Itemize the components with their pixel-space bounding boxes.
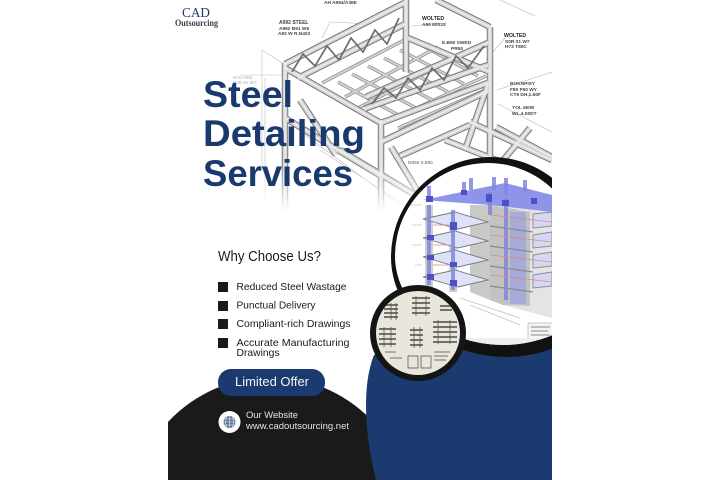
panel: steel frame drawing: A92 W R.N402 bbox=[278, 31, 311, 37]
title bbox=[204, 80, 362, 186]
benefits list bbox=[218, 281, 350, 359]
panel: rebar drawings ring bbox=[370, 285, 466, 381]
website text: www.cadoutsourcing.net bbox=[245, 421, 349, 432]
panel: steel frame drawing: AH A994/A36E bbox=[324, 0, 358, 6]
panel: steel frame drawing: WOLTED bbox=[504, 33, 526, 39]
website text: Our Website bbox=[246, 410, 298, 421]
benefits list: Compliant-rich Drawings bbox=[236, 318, 350, 330]
panel: steel frame drawing bbox=[233, 0, 552, 209]
panel: building image ring bbox=[391, 157, 552, 357]
icon: globe bbox=[218, 411, 240, 433]
title: Services bbox=[203, 153, 353, 194]
benefits list: Accurate Manufacturing bbox=[236, 337, 350, 349]
panel: steel frame drawing: S0R 01 W7 bbox=[505, 39, 530, 45]
logo: Outsourcing bbox=[175, 19, 218, 29]
heading: why choose us: Why Choose Us? bbox=[218, 249, 321, 265]
button: limited offer: Limited Offer bbox=[235, 374, 310, 389]
panel: steel frame drawing: BOKNPISY bbox=[510, 81, 536, 87]
panel: steel frame drawing: WL.4.00DT bbox=[512, 111, 537, 117]
panel: steel frame drawing: A55 6003S bbox=[422, 22, 447, 28]
panel: steel frame drawing: E.B50 SWED bbox=[442, 40, 472, 46]
panel: steel frame drawing: F80 F50 WY bbox=[510, 87, 538, 93]
button: limited offer bbox=[218, 369, 325, 396]
logo bbox=[175, 8, 218, 28]
panel: steel frame drawing: YOL 6I0W bbox=[512, 105, 535, 111]
panel: steel frame drawing: A992 B91 W6 bbox=[279, 26, 309, 32]
black semicircle background bbox=[168, 377, 376, 480]
panel: steel frame drawing: H73 T80C bbox=[505, 44, 527, 50]
benefits list: Reduced Steel Wastage bbox=[236, 281, 347, 293]
building model bbox=[410, 177, 560, 348]
rebar drawings bbox=[379, 296, 457, 368]
blue circle background bbox=[366, 340, 552, 480]
benefits list: Drawings bbox=[236, 347, 280, 359]
panel: steel frame drawing: BOLTED bbox=[233, 75, 253, 81]
panel: steel frame drawing: A992 STEEL bbox=[279, 20, 308, 26]
title: Steel bbox=[203, 74, 293, 115]
panel: steel frame drawing: D050 0.550 bbox=[408, 160, 433, 166]
website text bbox=[246, 412, 349, 431]
panel: steel frame drawing: WOLTED bbox=[422, 16, 444, 22]
logo: CAD bbox=[182, 6, 210, 21]
panel: steel frame drawing: PR50 bbox=[451, 46, 463, 52]
panel: steel frame drawing: CT9 DH,1.60F bbox=[510, 92, 541, 98]
benefits list: Punctual Delivery bbox=[236, 300, 316, 312]
panel: steel frame drawing: S06 01 W7 bbox=[233, 80, 257, 86]
title: Detailing bbox=[203, 113, 365, 154]
